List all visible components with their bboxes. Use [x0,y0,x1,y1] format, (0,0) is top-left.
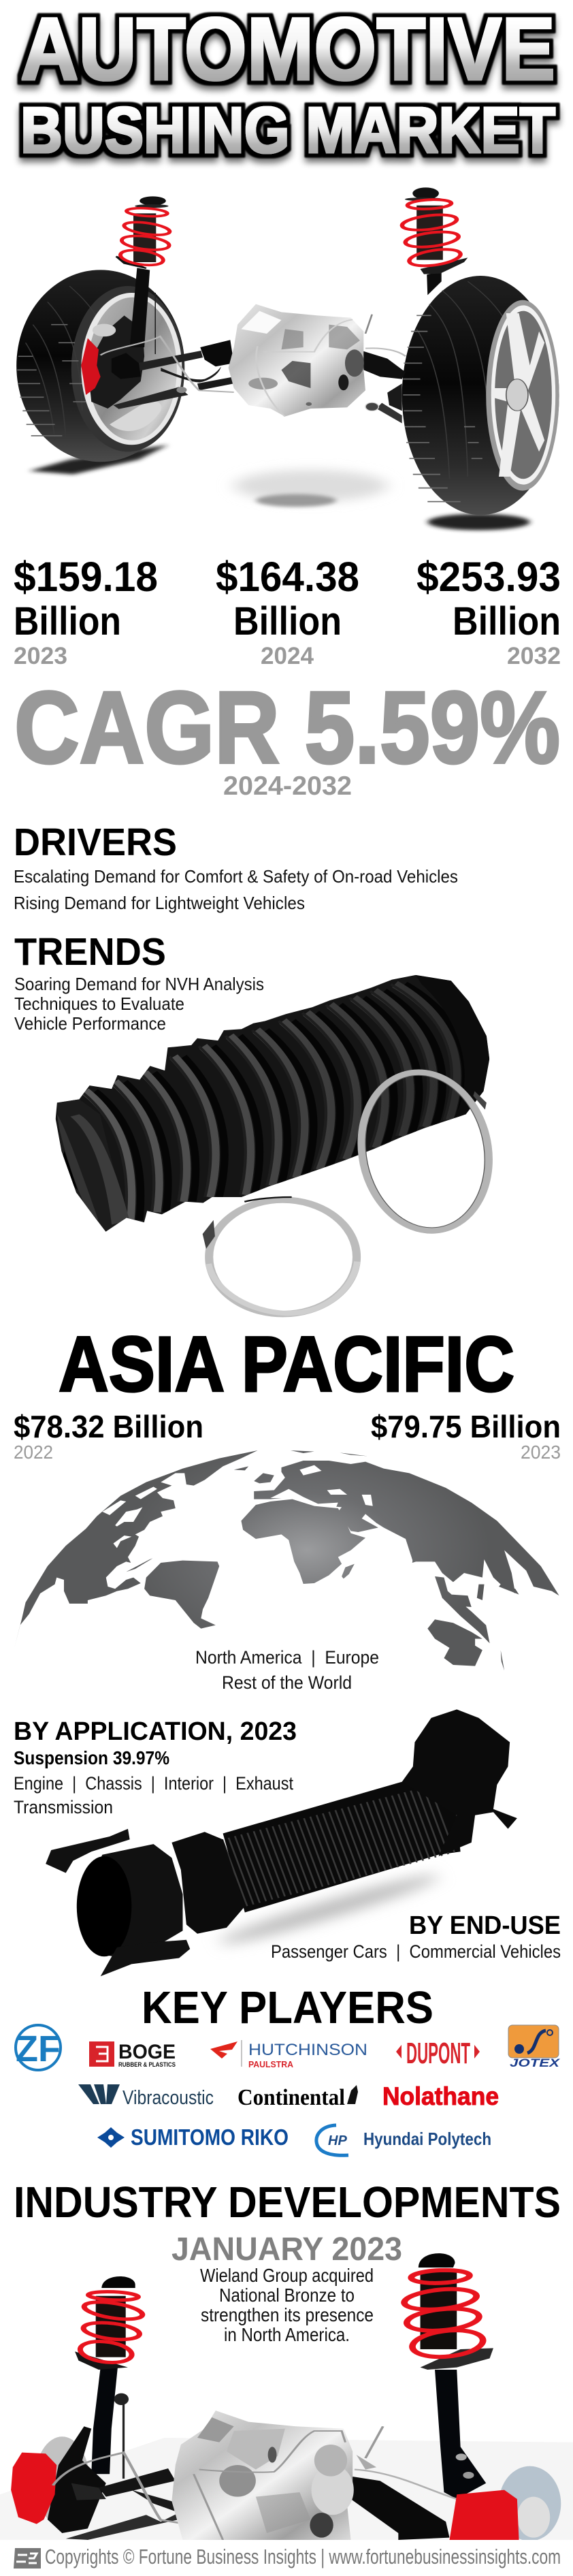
stat: 2032 [416,554,561,669]
trends text: Techniques to Evaluate [14,993,184,1014]
driver 1: Escalating Demand for Comfort & Safety of On-road Vehicles [14,866,458,887]
bellows [56,975,490,1232]
trends [14,930,264,1034]
drivers heading: DRIVERS [14,821,177,864]
development text [200,2265,374,2345]
logo: Hutchinson: HUTCHINSON [248,2041,367,2059]
axles and pipes [53,2426,457,2540]
by end-use [271,1911,561,1962]
by application: BY APPLICATION, 2023 [14,1717,297,1746]
stat: 2024: Billion [233,599,342,643]
gearbox [229,304,365,417]
stat: 2032: 2032 [507,643,561,669]
logo: Hutchinson [210,2040,367,2069]
ring clamp lower [203,1197,357,1314]
stat: 2032: $253.93 [416,554,561,600]
hose right head [402,1709,517,1856]
ring clamp upper [352,1068,499,1236]
trends text [14,974,264,1034]
logo: BOGE: BOGE [118,2041,176,2063]
footer logo [14,2548,41,2569]
stat: 2023: 2023 [14,643,67,669]
region value 2022: $78.32 Billion [14,1409,203,1444]
region value 2023: 2023 [521,1442,561,1463]
image: suspension assembly close-up [0,2253,573,2541]
map: arctic islands [291,1450,367,1456]
map: South East Asia [412,1558,519,1643]
other regions list [195,1647,379,1693]
map: North America lakes [102,1486,157,1548]
map: inland seas [270,1465,373,1507]
gearbox [171,2411,354,2540]
map: New Zealand sliver [501,1650,504,1670]
development text: strengthen its presence [201,2304,374,2325]
stat: 2023: Billion [14,599,121,643]
map: Australia [427,1619,482,1666]
by application [14,1717,297,1817]
logo: BOGE: RUBBER & PLASTICS [118,2061,176,2069]
trends text: Vehicle Performance [14,1013,166,1034]
logo: ZF: ZF [16,2029,61,2069]
map: Americas and Greenland [14,1450,258,1647]
by application: Engine | Chassis | Interior | Exhaust [14,1773,293,1794]
map: Iceland and UK [234,1466,274,1483]
stat: 2024: $164.38 [216,554,359,600]
hero image: car suspension with wheels [16,187,559,530]
ground shadows [29,445,530,530]
stat: 2024 [216,554,359,669]
logo: Hyundai Polytech: Hyundai Polytech [363,2129,491,2149]
logo: Jotex [508,2025,561,2069]
trends heading: TRENDS [14,930,166,974]
logo: Vibracoustic: Vibracoustic [122,2087,214,2109]
map: Africa [241,1499,365,1584]
stat: 2032: Billion [453,599,561,643]
logo: BOGE [89,2041,176,2069]
logo: Vibracoustic [78,2084,214,2109]
map: Eurasia [254,1461,559,1595]
right strut and spring [400,187,468,295]
logo: Jotex: JOTEX [510,2056,561,2069]
left strut and spring [116,196,171,347]
hose cup [77,1844,183,1958]
map: Madagascar [342,1564,355,1578]
region value 2023: $79.75 Billion [371,1409,561,1444]
by end-use: BY END-USE [409,1911,561,1940]
right wheel [402,276,559,515]
key players heading: KEY PLAYERS [142,1982,433,2033]
left strut and spring [75,2276,145,2479]
footer [14,2545,561,2569]
region value 2023 [371,1409,561,1463]
logo: DuPont: DUPONT [406,2037,470,2070]
logo: Sumitomo Riko: SUMITOMO RIKO [131,2125,289,2150]
development date: JANUARY 2023 [171,2231,402,2268]
stat: 2024: 2024 [261,643,314,669]
logo: Hyundai Polytech: HP [328,2133,347,2148]
hose collar [171,1832,245,1934]
region value 2022: 2022 [14,1442,53,1463]
map: South America [144,1561,219,1629]
hose clips [46,1829,190,1976]
CAGR period: 2024-2032 [223,772,352,801]
development text: in North America. [224,2324,350,2345]
region value 2022 [14,1409,203,1463]
axle and steering rack [101,315,406,424]
logo: DuPont [396,2037,480,2070]
stat: 2023: $159.18 [14,554,158,600]
stat: 2023 [14,554,158,669]
left wheel [16,270,184,462]
drivers [14,821,458,913]
world map dome [14,1450,559,1670]
by application: Suspension 39.97% [14,1747,169,1768]
right strut and spring [402,2253,493,2499]
driver 2: Rising Demand for Lightweight Vehicles [14,893,305,913]
title [20,0,555,167]
by application: Transmission [14,1797,113,1817]
development text: National Bronze to [219,2285,355,2306]
trends text: Soaring Demand for NVH Analysis [14,974,264,994]
logo: Hutchinson: PAULSTRA [248,2059,294,2069]
development text: Wieland Group acquired [200,2265,374,2286]
right disc [499,2466,561,2541]
image: rubber bellows with clamps [41,967,504,1314]
map: Caribbean [126,1558,152,1572]
region heading: ASIA PACIFIC [59,1321,514,1408]
other regions list: Rest of the World [222,1672,352,1693]
image: corrugated black hose [46,1709,517,1976]
logo: Hyundai Polytech [316,2125,491,2155]
left brake disc and hub [11,2426,106,2533]
right caliper [450,2490,519,2540]
logo: Continental: Continental [238,2085,345,2110]
other regions list: North America | Europe [195,1647,379,1668]
logo: Nolathane: Nolathane [382,2082,499,2110]
